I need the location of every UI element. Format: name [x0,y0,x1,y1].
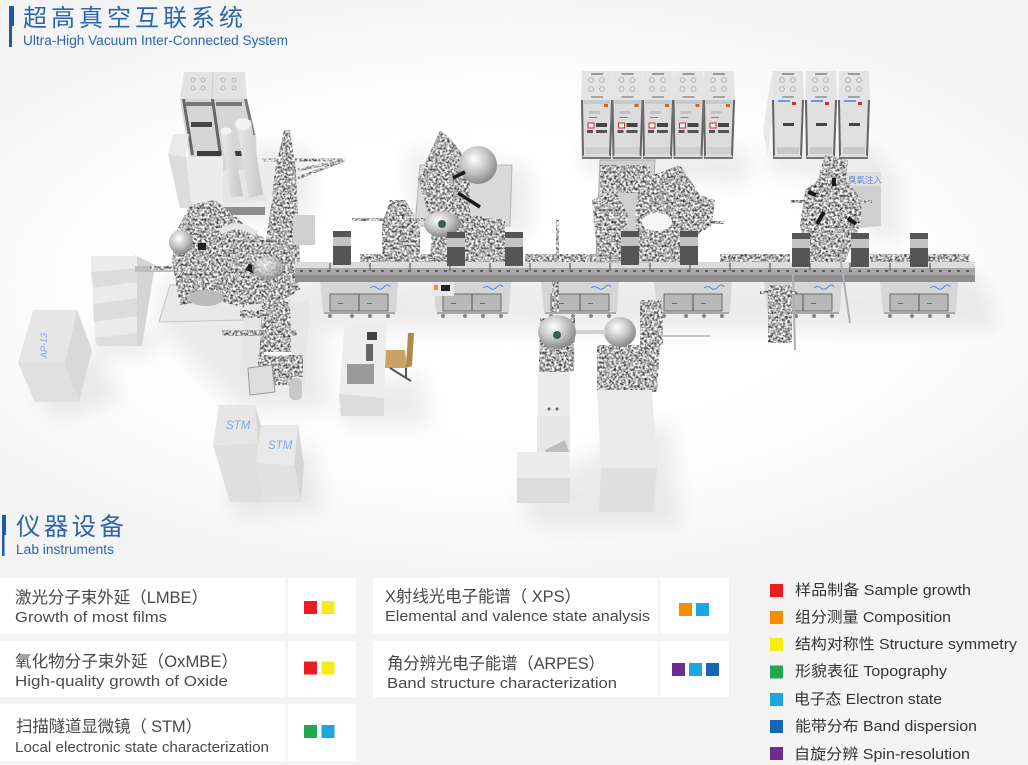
equipment: oxide chrome cluster [222,300,303,385]
equipment: arpes chrome cluster [592,165,725,262]
legend: sample growth: 样品制备 Sample growth [795,582,971,599]
panel: XPS [373,578,729,634]
equipment: stm cabinets [213,405,304,502]
XPS name: X射线光电子能谱（ XPS） [385,587,581,606]
equipment: stacked white blocks [91,255,180,346]
equipment: oxide stage [240,300,310,385]
label: stm right: STM [268,440,293,452]
equipment: left control racks [180,72,258,190]
STM tags [304,725,334,738]
equipment: transfer rail [295,262,975,282]
equipment: rail cabinets [320,282,958,318]
ARPES tags [672,663,719,676]
label: cabinet text: AP-13 [39,333,49,359]
XPS tags [679,603,709,616]
equipment: white enclosure and two cylinders [168,118,268,215]
legend: spin resolution: 自旋分辨 Spin-resolution [794,746,970,763]
instruments english: Lab instruments [16,542,114,557]
equipment: rail chrome fittings [360,220,970,262]
equipment: lmbe chrome cluster [150,130,345,312]
equipment: large white box [597,390,657,512]
STM description: Local electronic state characterization [15,739,269,756]
equipment: operator desk and chair [339,322,414,416]
LMBE description: Growth of most films [15,609,167,626]
heading: lab instruments [2,513,124,557]
OxMBE tags [304,662,334,674]
equipment: five rack row [581,71,735,159]
equipment: star chrome cluster [790,155,872,262]
equipment: star chamber box [845,172,883,228]
equipment: lower tower [517,372,570,503]
equipment: star black ports [808,178,856,224]
legend: electron state: 电子态 Electron state [794,691,942,708]
equipment: lower chamber domes [538,315,710,349]
label: ozone box text: 臭氧注入 [848,175,883,185]
panel: OxMBE [0,641,356,697]
equipment: dark rail modules [333,231,928,267]
equipment: lmbe details [169,215,315,306]
panel: LMBE [0,578,356,634]
XPS description: Elemental and valence state analysis [385,608,650,625]
panel: STM [0,704,356,761]
equipment: three rack row [763,71,870,159]
heading: system title [9,5,288,48]
panel: ARPES [373,641,729,697]
LMBE tags [304,601,334,614]
equipment: cart chrome frame [760,285,798,343]
equipment: xps chrome cluster [352,130,505,262]
equipment: oxide base box [248,352,302,400]
equipment: long rod and ladder cart [793,255,850,350]
equipment: lower chambers chrome [539,282,663,392]
label: stm left: STM [226,420,251,432]
OxMBE description: High-quality growth of Oxide [15,673,228,690]
title english: Ultra-High Vacuum Inter-Connected System [23,33,288,48]
legend: composition: 组分测量 Composition [795,609,951,626]
legend: topography: 形貌表征 Topography [795,663,948,680]
equipment: arpes plate and frame [596,160,655,262]
equipment floor shadows [30,150,1000,525]
legend: structure symmetry: 结构对称性 Structure symmetry [795,636,1018,653]
OxMBE name: 氧化物分子束外延（OxMBE） [15,652,238,671]
equipment: lmbe chamber base plate [159,285,250,322]
equipment: left grey cabinet [18,310,92,402]
title chinese: 超高真空互联系统 [23,5,243,32]
legend: band dispersion: 能带分布 Band dispersion [795,718,977,735]
equipment: xps plate [415,165,512,226]
instruments chinese: 仪器设备 [16,513,124,541]
LMBE name: 激光分子束外延（LMBE） [15,588,208,607]
ARPES name: 角分辨光电子能谱（ARPES） [387,654,605,673]
ARPES description: Band structure characterization [387,675,617,692]
equipment: xps details [424,146,497,237]
STM name: 扫描隧道显微镜（ STM） [16,717,202,736]
legend [770,582,1018,763]
equipment: arpes bright dome [642,213,672,231]
